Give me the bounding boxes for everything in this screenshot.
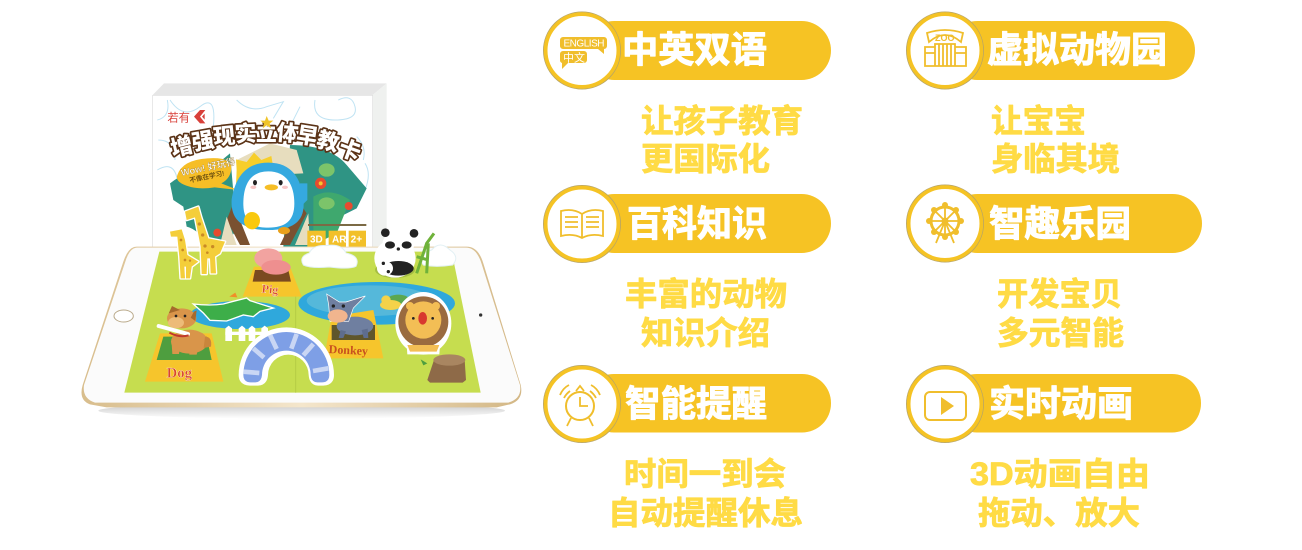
feature: 智能提醒 [543, 365, 831, 531]
pond right [298, 282, 455, 325]
description: 让孩子教育 [641, 103, 803, 139]
tree stump [421, 354, 466, 383]
box title: 早 [295, 122, 320, 150]
description: 知识介绍 [641, 315, 770, 351]
crocodile [193, 293, 273, 321]
dog card [145, 306, 223, 382]
pill [948, 194, 1202, 253]
description: 自动提醒休息 [608, 495, 803, 531]
feature: 智趣乐园 [906, 185, 1202, 351]
donkey card: Donkey [328, 342, 368, 358]
bamboo [417, 233, 434, 273]
dog card: Dog [167, 365, 193, 381]
lion [395, 292, 451, 355]
icon: alarm clock [543, 365, 621, 443]
pill [585, 21, 831, 80]
icon: ferris wheel [906, 185, 984, 262]
speech bubble: 不像在学习! [189, 168, 225, 185]
description: 拖动、放大 [978, 495, 1140, 531]
icon: zoo gate: ZOO [935, 33, 954, 43]
age badges: 2+ [351, 235, 362, 246]
pill [585, 374, 831, 432]
logo [167, 110, 205, 125]
icon: zoo gate [906, 12, 984, 89]
pig card [243, 248, 302, 297]
giraffe small [170, 229, 198, 278]
heading: 智能提醒 [625, 383, 767, 424]
description [970, 456, 1150, 531]
box title: 教 [314, 127, 342, 156]
home button [114, 310, 133, 322]
logo: 若有 [167, 111, 190, 125]
box title: 体 [276, 120, 300, 147]
box title [168, 120, 364, 166]
box title: 立 [256, 122, 277, 146]
description [625, 276, 787, 351]
feature: 虚拟动物园 [906, 12, 1195, 177]
description: 3D动画自由 [970, 456, 1150, 492]
icon: speech bubbles: 中文 [563, 50, 585, 64]
icon: speech bubbles [543, 12, 621, 89]
jungle leaves [170, 143, 367, 247]
heading: 实时动画 [989, 383, 1133, 424]
icon: book [543, 185, 621, 263]
box title: 强 [190, 127, 216, 155]
arch bridge [239, 327, 334, 386]
speech bubble [177, 156, 238, 190]
pill [585, 194, 831, 253]
heading: 智趣乐园 [989, 203, 1131, 244]
penguin mascot [232, 153, 307, 234]
description: 更国际化 [641, 141, 770, 177]
duck [380, 295, 410, 310]
description: 身临其境 [991, 141, 1120, 177]
feature: 百科知识 [543, 185, 831, 351]
heading: 中英双语 [622, 29, 767, 70]
pill [948, 374, 1201, 432]
box title: 实 [234, 121, 257, 147]
heading: 百科知识 [627, 203, 767, 244]
icon: video play [906, 365, 984, 443]
age badges: AR [332, 235, 346, 246]
illustration: product box and tablet [81, 83, 521, 419]
description [641, 103, 803, 177]
description: 让宝宝 [991, 103, 1086, 139]
feature: 中英双语 [543, 12, 831, 177]
icon: speech bubbles: ENGLISH [564, 38, 604, 50]
box title: 现 [212, 123, 237, 150]
description: 多元智能 [997, 315, 1124, 351]
pig card: Pig [261, 281, 279, 297]
pond left [190, 301, 290, 329]
fence [225, 326, 269, 341]
description: 开发宝贝 [997, 276, 1122, 312]
camera [479, 313, 482, 317]
pill [948, 21, 1195, 80]
box title: 增 [168, 132, 195, 162]
feature: 实时动画 [906, 365, 1201, 531]
description [608, 456, 803, 531]
speech bubble: Wow! 好玩得 [180, 156, 236, 178]
giraffe tall [185, 207, 225, 274]
age badges [307, 224, 366, 247]
heading: 虚拟动物园 [987, 29, 1167, 70]
screen [124, 252, 481, 393]
cloud right [421, 245, 456, 266]
description: 时间一到会 [624, 456, 786, 492]
box title: 卡 [335, 135, 364, 166]
tablet [81, 207, 521, 419]
cloud left [302, 245, 357, 268]
description [991, 103, 1120, 177]
product box [153, 83, 387, 247]
age badges: 3D [310, 235, 323, 246]
description [997, 276, 1124, 351]
description: 丰富的动物 [625, 276, 787, 312]
donkey card [324, 294, 383, 358]
panda [374, 228, 418, 278]
